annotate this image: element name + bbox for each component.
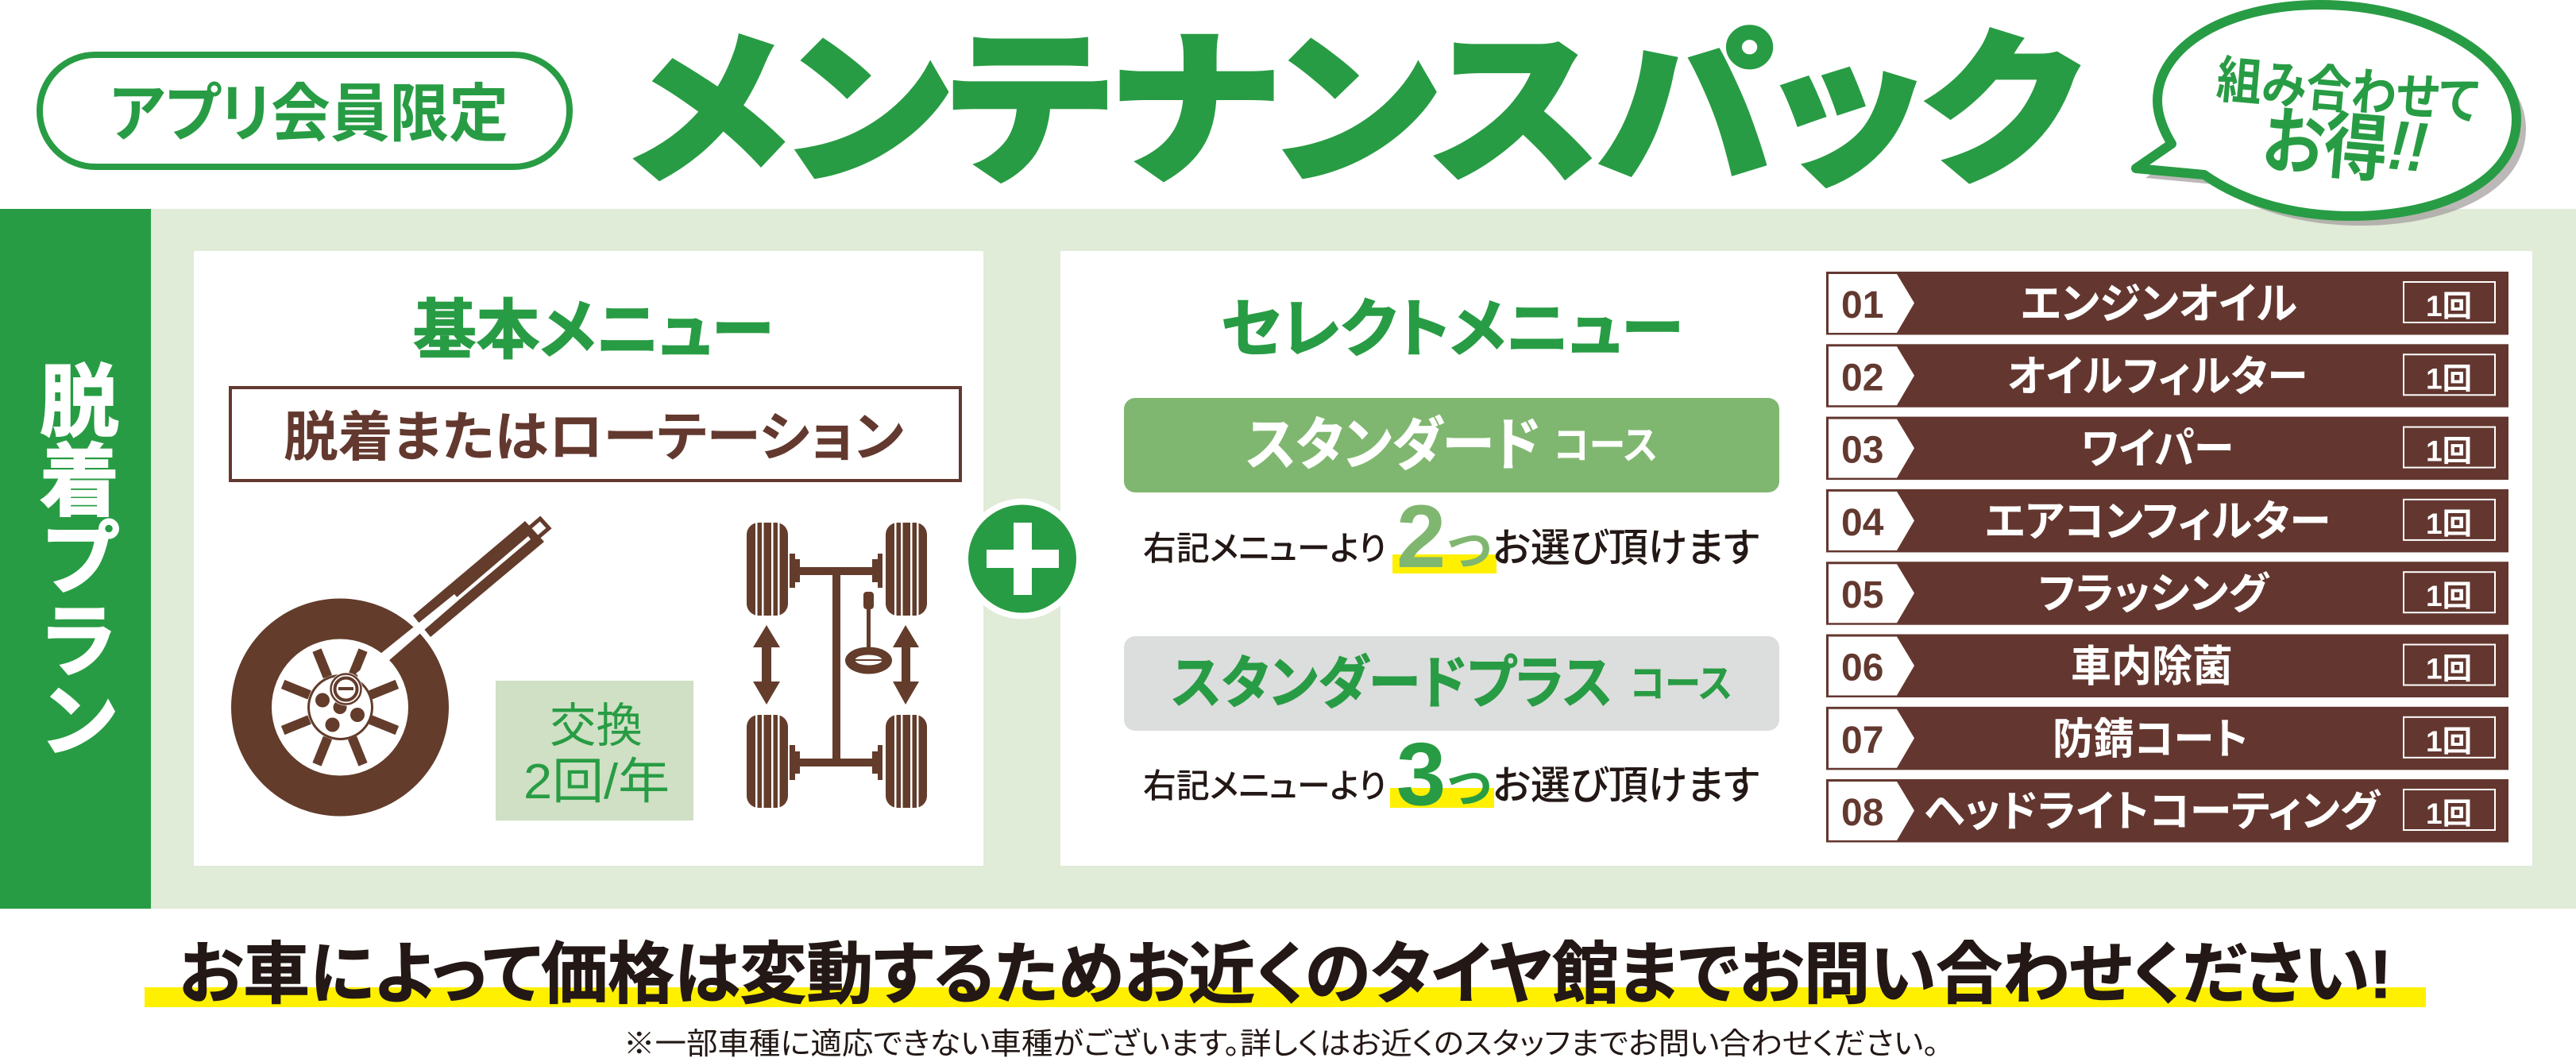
badge: app members only: アプリ会員限定 [110, 79, 508, 149]
speech bubble callout: お得 [2259, 100, 2392, 192]
left bar: plan name: 着 [40, 438, 119, 527]
menu row 04: 04 [1841, 502, 1884, 544]
standard choose two text [1143, 487, 1759, 586]
main light green band [0, 209, 2576, 909]
menu row 05: フラッシング [2038, 570, 2270, 618]
standard plus choose three text: つ [1447, 763, 1491, 814]
icon: car chassis rotation [747, 520, 927, 810]
panel: select menu [1060, 251, 2532, 866]
standard choose two text: つ [1447, 525, 1491, 577]
standard course block [1124, 398, 1779, 492]
menu row 06: 車内除菌 [2071, 643, 2233, 691]
speech bubble callout: !! [2385, 105, 2431, 187]
menu row 07: 07 [1841, 720, 1883, 762]
menu row 05: 05 [1841, 574, 1883, 616]
speech bubble callout [2136, 5, 2526, 226]
plus icon [962, 499, 1083, 620]
menu row 05: 1回 [2426, 580, 2472, 612]
footer notice with yellow highlight: お車によって価格は変動するためお近くのタイヤ館までお問い合わせください! [179, 937, 2392, 1013]
rotation label box [230, 388, 960, 481]
menu row 02: 02 [1841, 357, 1883, 399]
menu row 02: オイルフィルター [2007, 353, 2308, 400]
menu row 04: エアコンフィルター [1985, 498, 2331, 546]
left bar: plan name [0, 209, 151, 909]
menu row 04: 1回 [2426, 508, 2472, 540]
standard choose two text: 右記メニューより [1143, 530, 1386, 567]
standard course block: スタンダード [1246, 414, 1540, 477]
standard plus choose three text: お選び頂けます [1493, 763, 1759, 808]
left bar: plan name: ラ [43, 598, 116, 687]
standard plus choose three text: 3 [1396, 724, 1446, 824]
standard plus course block: コース [1630, 662, 1732, 706]
menu row 05 [1826, 562, 2508, 625]
menu row 08: 08 [1841, 792, 1883, 834]
standard plus course block [1124, 636, 1779, 731]
menu row 01: 1回 [2426, 290, 2472, 322]
menu row 02 [1826, 344, 2508, 407]
icon: tire and wrench [231, 519, 549, 817]
exchange frequency box: 交換 [550, 700, 643, 752]
standard choose two text: 2 [1396, 487, 1446, 586]
exchange frequency box [496, 681, 693, 821]
menu row 01: 01 [1841, 284, 1883, 326]
left bar: plan name: 脱 [40, 358, 119, 447]
menu row 01 [1826, 272, 2508, 335]
badge: app members only [40, 55, 570, 167]
menu row 02: 1回 [2426, 362, 2472, 395]
heading: basic menu: 基本メニュー [413, 295, 774, 367]
standard plus choose three text: 右記メニューより [1143, 767, 1386, 805]
menu row 03: ワイパー [2081, 426, 2234, 473]
menu row 03 [1826, 417, 2508, 480]
menu row 07: 防錆コート [2053, 716, 2248, 763]
menu row 08: 1回 [2426, 797, 2472, 830]
exchange frequency box: 2回/年 [523, 755, 670, 809]
menu row 08: ヘッドライトコーティング [1924, 788, 2381, 836]
menu row 08 [1826, 779, 2508, 842]
standard choose two text: お選び頂けます [1493, 526, 1759, 570]
menu row 07 [1826, 707, 2508, 770]
menu row 06: 1回 [2426, 653, 2472, 685]
left bar: plan name: ン [43, 678, 116, 766]
left bar: plan name: プ [43, 515, 119, 604]
standard course block: コース [1554, 423, 1658, 468]
rotation label box: 脱着またはローテーション [284, 407, 904, 468]
speech bubble callout: 組み合わせて [2215, 51, 2481, 131]
menu row 04 [1826, 489, 2508, 552]
menu row 01: エンジンオイル [2021, 280, 2297, 328]
menu row 06: 06 [1841, 647, 1883, 689]
panel: basic menu [194, 251, 983, 866]
menu row 03: 1回 [2426, 435, 2472, 468]
heading: select menu: セレクトメニュー [1221, 294, 1683, 365]
standard plus course block: スタンダードプラス [1172, 652, 1612, 716]
menu row 06 [1826, 634, 2508, 697]
menu row 03: 03 [1841, 430, 1883, 472]
menu row 07: 1回 [2426, 725, 2472, 758]
standard plus choose three text [1143, 724, 1759, 824]
title: メンテナンスパック [630, 18, 2080, 205]
